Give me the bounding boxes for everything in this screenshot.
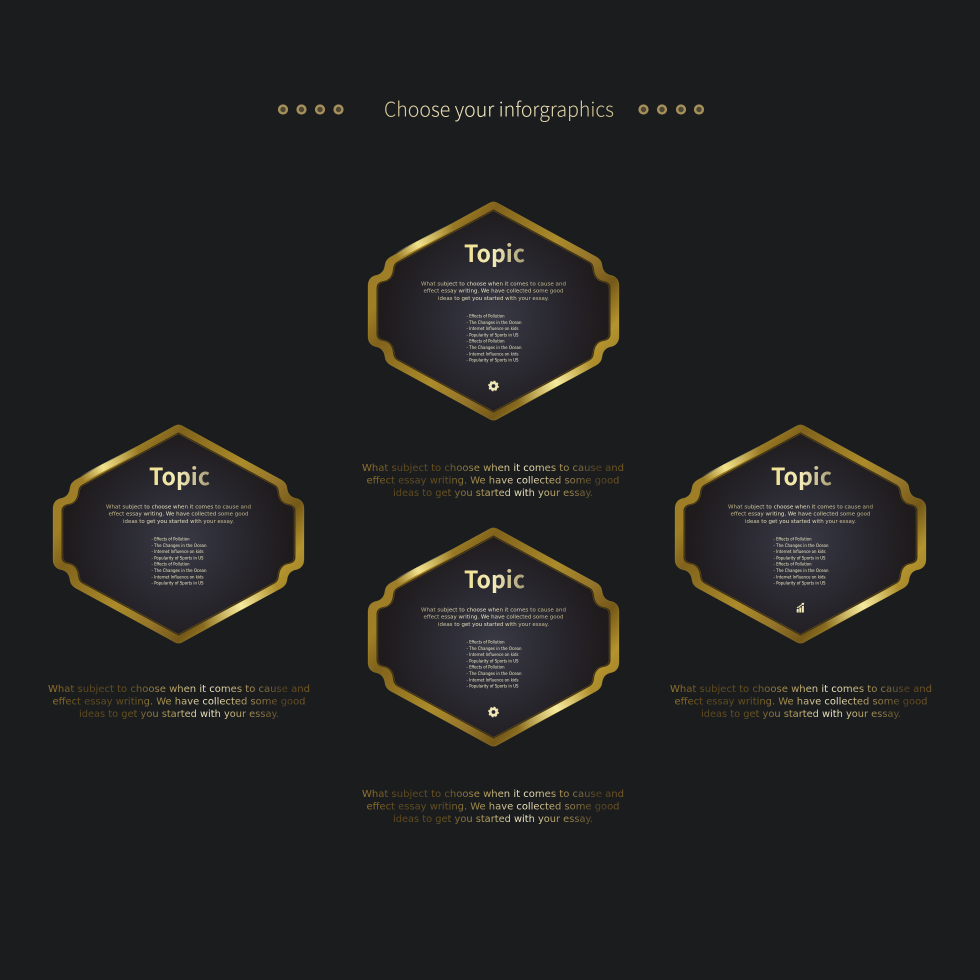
icon: rising bar chart bbox=[797, 603, 804, 612]
topic list: - Effects of Pollution bbox=[466, 339, 505, 344]
caption: left bbox=[48, 684, 310, 720]
caption: top centre: ideas to get you started with your essay. bbox=[393, 488, 593, 499]
panel: top centre badge bbox=[368, 202, 619, 420]
caption: top centre bbox=[362, 463, 624, 499]
caption: left: ideas to get you started with your essay. bbox=[79, 709, 279, 720]
topic list: - Internet Influence on kids bbox=[152, 549, 204, 554]
description: effect essay writing. We have collected some good bbox=[730, 512, 870, 518]
caption: right: effect essay writing. We have collected some good bbox=[674, 696, 928, 708]
description: ideas to get you started with your essay. bbox=[745, 519, 856, 525]
description: ideas to get you started with your essay. bbox=[123, 519, 234, 525]
topic list: - Popularity of Sports in US bbox=[152, 581, 204, 586]
description: effect essay writing. We have collected some good bbox=[424, 614, 564, 620]
left ornament dots bbox=[279, 106, 342, 113]
caption: bottom centre bbox=[362, 789, 624, 825]
description: What subject to choose when it comes to cause and bbox=[728, 504, 873, 510]
topic list: - Popularity of Sports in US bbox=[466, 358, 519, 363]
topic list: - Effects of Pollution bbox=[466, 640, 505, 644]
gold frame bbox=[368, 202, 619, 420]
topic list: - The Changes in the Ocean bbox=[774, 568, 829, 573]
topic list: - The Changes in the Ocean bbox=[466, 345, 522, 350]
description: What subject to choose when it comes to cause and bbox=[421, 608, 566, 614]
topic list: - Effects of Pollution bbox=[774, 536, 812, 542]
caption: left: effect essay writing. We have collected some good bbox=[52, 696, 306, 708]
caption: top centre: effect essay writing. We have collected some good bbox=[366, 476, 620, 486]
topic list: - Internet Influence on kids bbox=[466, 652, 518, 657]
panel: bottom centre badge bbox=[368, 528, 619, 746]
topic list bbox=[774, 536, 829, 586]
caption: bottom centre: What subject to choose when it comes to cause and bbox=[362, 789, 624, 800]
topic list: - Internet Influence on kids bbox=[774, 549, 826, 554]
topic list bbox=[152, 536, 207, 586]
topic list: - Popularity of Sports in US bbox=[774, 581, 826, 586]
icon: gear bbox=[489, 707, 498, 717]
topic list: - Popularity of Sports in US bbox=[466, 658, 519, 663]
caption: right: ideas to get you started with your essay. bbox=[701, 709, 901, 720]
caption: left: What subject to choose when it comes to cause and bbox=[48, 684, 310, 695]
caption: right bbox=[670, 684, 932, 720]
gold frame bbox=[368, 528, 619, 746]
heading: Topic bbox=[464, 235, 525, 269]
description: effect essay writing. We have collected some good bbox=[424, 288, 564, 294]
topic list: - The Changes in the Ocean bbox=[152, 568, 207, 573]
caption: top centre: What subject to choose when it comes to cause and bbox=[362, 463, 624, 474]
caption: bottom centre: effect essay writing. We have collected some good bbox=[366, 802, 620, 812]
topic list: - The Changes in the Ocean bbox=[774, 543, 829, 548]
heading: Topic bbox=[771, 458, 832, 492]
topic list: - The Changes in the Ocean bbox=[466, 646, 522, 651]
header row bbox=[279, 94, 703, 122]
description: ideas to get you started with your essay. bbox=[438, 296, 549, 302]
caption: right: What subject to choose when it comes to cause and bbox=[670, 684, 932, 695]
description: effect essay writing. We have collected some good bbox=[108, 512, 248, 518]
icon: gear bbox=[489, 381, 498, 391]
topic list: - The Changes in the Ocean bbox=[466, 320, 522, 325]
topic list: - Internet Influence on kids bbox=[466, 326, 518, 331]
topic list: - Effects of Pollution bbox=[774, 562, 812, 567]
right ornament dots bbox=[640, 106, 703, 113]
heading: Topic bbox=[464, 561, 525, 595]
topic list bbox=[466, 314, 522, 363]
topic list: - Popularity of Sports in US bbox=[774, 555, 826, 560]
topic list: - Popularity of Sports in US bbox=[466, 684, 519, 689]
topic list: - Effects of Pollution bbox=[466, 314, 505, 318]
topic list bbox=[466, 640, 522, 689]
description bbox=[421, 282, 566, 302]
topic list: - Popularity of Sports in US bbox=[466, 332, 519, 337]
caption: bottom centre: ideas to get you started with your essay. bbox=[393, 814, 593, 825]
panel: right badge bbox=[675, 425, 926, 643]
topic list: - Internet Influence on kids bbox=[466, 351, 518, 356]
topic list: - Effects of Pollution bbox=[466, 665, 505, 670]
description bbox=[728, 504, 873, 525]
description: What subject to choose when it comes to cause and bbox=[421, 282, 566, 288]
topic list: - Internet Influence on kids bbox=[774, 574, 826, 579]
panel: left badge bbox=[53, 425, 304, 643]
topic list: - The Changes in the Ocean bbox=[466, 671, 522, 676]
topic list: - Popularity of Sports in US bbox=[152, 555, 204, 560]
topic list: - Effects of Pollution bbox=[152, 536, 190, 542]
gold frame bbox=[675, 425, 926, 643]
topic list: - Internet Influence on kids bbox=[466, 677, 518, 682]
title: Choose your inforgraphics bbox=[384, 94, 614, 122]
description: ideas to get you started with your essay. bbox=[438, 622, 549, 628]
description bbox=[421, 608, 566, 628]
topic list: - Internet Influence on kids bbox=[152, 574, 204, 579]
description bbox=[106, 504, 251, 525]
topic list: - Effects of Pollution bbox=[152, 562, 190, 567]
heading: Topic bbox=[149, 458, 210, 492]
topic list: - The Changes in the Ocean bbox=[152, 543, 207, 548]
description: What subject to choose when it comes to cause and bbox=[106, 504, 251, 510]
gold frame bbox=[53, 425, 304, 643]
